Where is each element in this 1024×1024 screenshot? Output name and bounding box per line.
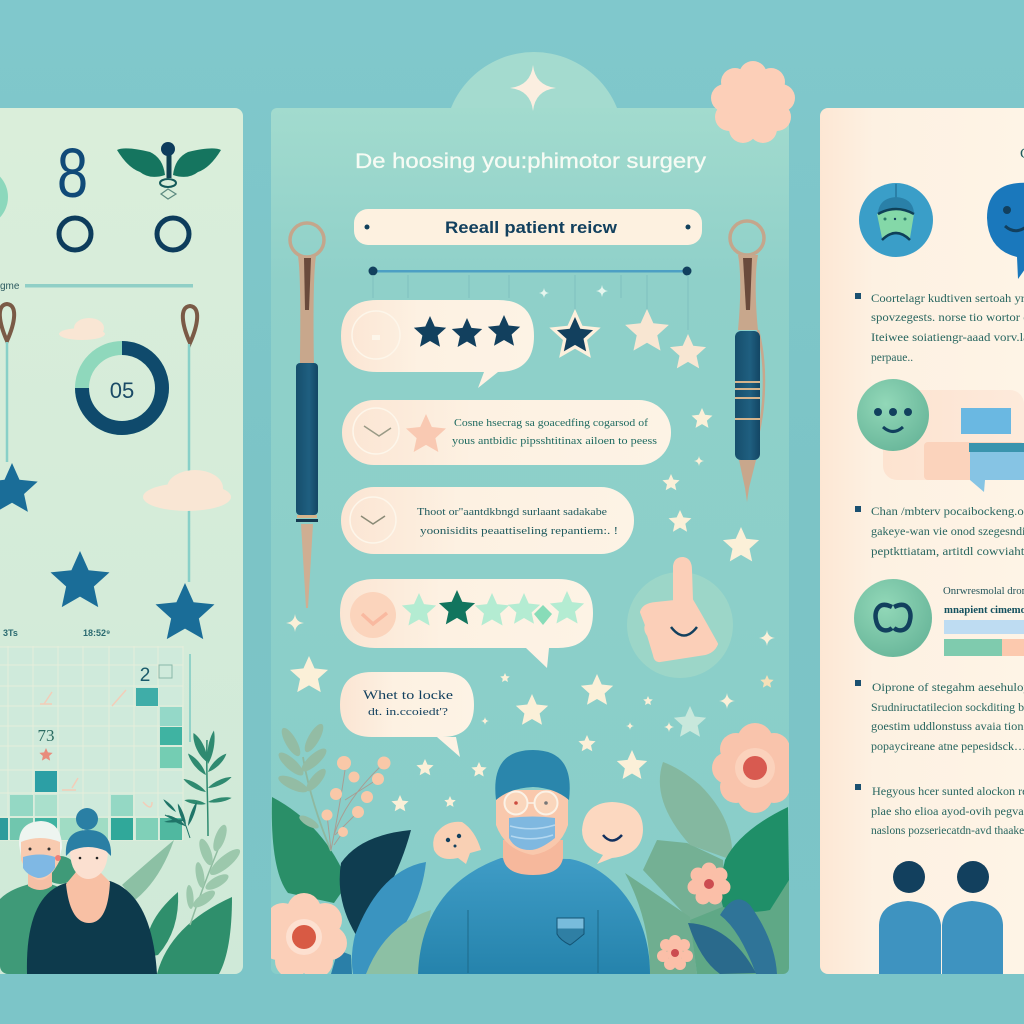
donut gauge: 05 <box>110 378 134 403</box>
text block two: peptkttiatam, artitdl cowviahtrao <box>871 546 1024 558</box>
panel: right guidance <box>820 108 1024 974</box>
icon: smile speech bubble <box>987 146 1024 279</box>
review bubble: what to look for: dt. in.ccoiedt'? <box>368 706 448 718</box>
panel: centre reviews <box>261 52 798 978</box>
stat labels: 3Ts <box>3 628 18 638</box>
timeline <box>368 266 692 330</box>
review bubble: text two: yoonisidits peaattiseling repantiem:. ! <box>420 525 618 537</box>
plants: lower leaves <box>122 823 243 974</box>
stat labels: 18:52⁹ <box>83 628 110 638</box>
donut gauge <box>82 348 162 428</box>
flower: right large <box>712 723 789 813</box>
plant: fern <box>182 730 233 836</box>
flower: small pair <box>657 862 730 970</box>
decorative stars field <box>286 456 775 811</box>
large numeral eight: 8 <box>57 134 88 212</box>
plant: small sprig <box>162 798 199 838</box>
label and divider <box>0 284 193 291</box>
hanging stars <box>539 285 712 428</box>
text block four: Hegyous hcer sunted alockon reln <box>872 786 1024 798</box>
person: masked patient <box>0 821 78 974</box>
text block three <box>855 680 1024 753</box>
instrument: left forceps <box>290 223 324 608</box>
review bubble: three stars <box>341 300 534 388</box>
stat badge and bars <box>854 579 1024 657</box>
title: De hoosing you:phimotor surgery <box>355 150 707 173</box>
icon: top flower <box>711 61 795 143</box>
cloud shapes <box>59 318 231 511</box>
rating stars <box>0 463 214 639</box>
text block two: Chan /mbterv pocaibockeng.of pl <box>871 506 1024 518</box>
instrument: right forceps <box>730 221 764 502</box>
flower: left large <box>271 893 347 974</box>
review bubble: text two <box>341 487 634 554</box>
text block one: Coortelagr kudtiven sertoah yront <box>871 293 1024 305</box>
surgeon <box>418 750 650 974</box>
text block three: popaycireane atne pepesidsck… <box>871 741 1024 753</box>
icon: green badge <box>0 176 8 218</box>
speech bubbles near surgeon <box>433 802 643 864</box>
foliage right <box>625 762 789 974</box>
review bubble: text one: yous antbidic pipsshtitinax ailoen to peess <box>452 435 657 447</box>
icon: winged caduceus <box>117 142 221 199</box>
two figures <box>879 861 1003 974</box>
text block one: Iteiwee soiatiengr-aaad vorv.lanc <box>871 332 1024 344</box>
text block two <box>855 506 1024 558</box>
calendar heatmap <box>0 646 183 840</box>
ring indicators <box>59 218 189 250</box>
person: woman in dark top <box>27 808 157 974</box>
review bubble: text two: Thoot or"aantdkbngd surlaant sadakabe <box>417 507 607 518</box>
icon: thumbs up <box>627 559 733 678</box>
hanging hooks <box>0 304 197 582</box>
stat badge and bars: mnapient cimemo <box>944 605 1024 616</box>
text block one: spovzegests. norse tio wortor coc <box>871 312 1024 324</box>
subtitle pill <box>354 209 702 245</box>
calendar heatmap: 73 <box>38 726 54 745</box>
arch top <box>444 52 624 231</box>
review bubble: text one: Cosne hsecrag sa goacedfing cogarsod of <box>454 417 648 429</box>
text block three: goestim uddlonstuss avaia tiongo <box>871 721 1024 733</box>
text block four <box>855 784 1024 837</box>
review bubble: what to look for <box>340 672 474 757</box>
icon: sparkle <box>510 65 556 111</box>
calendar heatmap: 2 <box>140 665 150 686</box>
subtitle pill: Reeall patient reicw <box>445 218 618 237</box>
text block one <box>855 293 1024 364</box>
review bubble: what to look for: Whet to locke <box>363 687 453 702</box>
review bubble: green stars <box>340 579 593 668</box>
chat graphic <box>857 379 1024 492</box>
review bubble: text one <box>342 400 671 465</box>
label and divider: gme <box>0 281 20 292</box>
text block four: plae sho elioa ayod-ovih pegvacti <box>871 806 1024 818</box>
text block one: perpaue.. <box>871 352 913 364</box>
icon: helmet badge <box>859 183 933 257</box>
text block three: Oiprone of stegahm aesehuloy <box>872 682 1024 694</box>
foliage left <box>272 721 431 974</box>
stat labels <box>3 630 110 636</box>
panel: left dashboard <box>0 108 243 974</box>
